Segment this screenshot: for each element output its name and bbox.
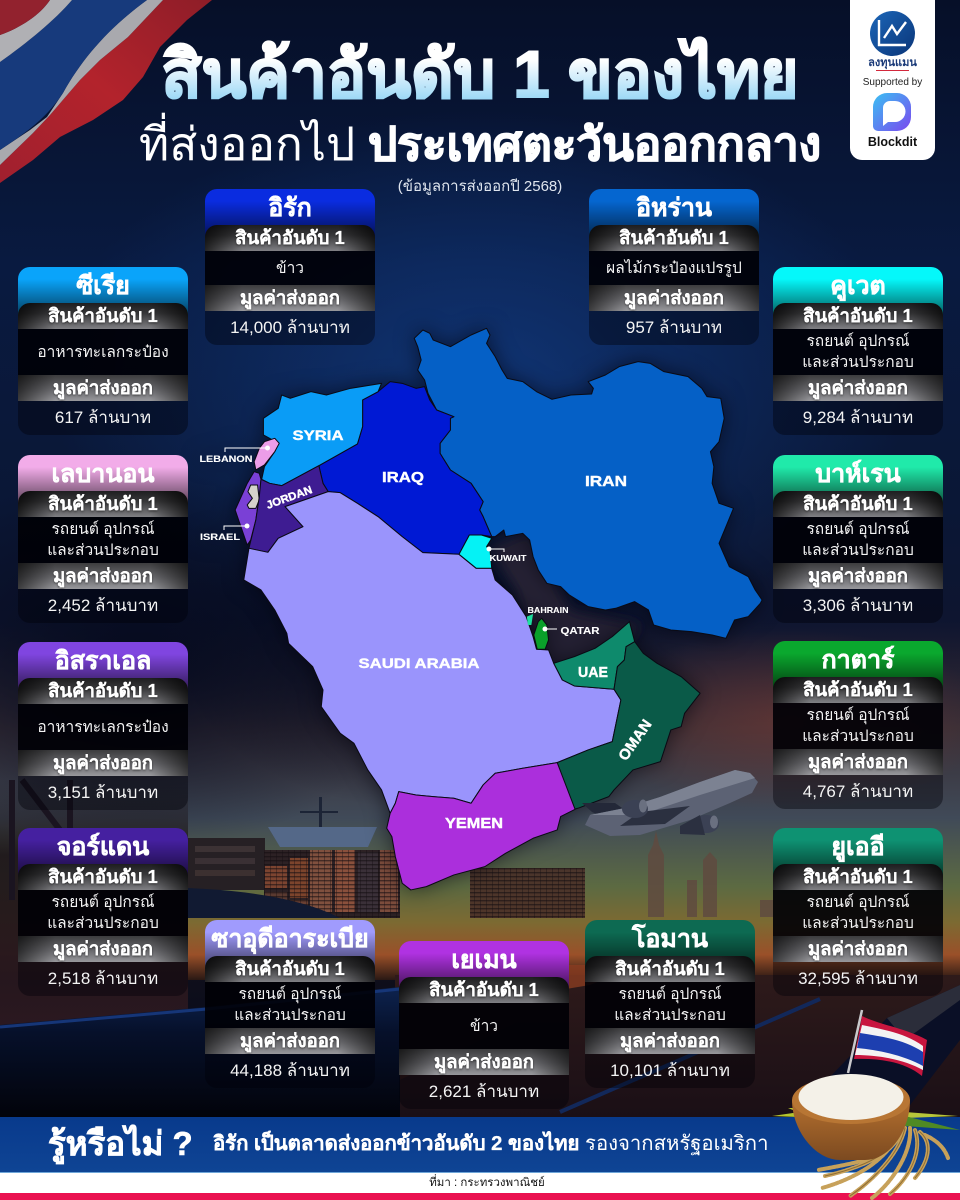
country name [589,189,759,237]
value [18,776,188,810]
product: และส่วนประกอบ [802,728,914,745]
value label: มูลค่าส่งออก [240,1030,340,1051]
country labels [200,427,656,832]
lower white band [0,0,163,165]
rank label: สินค้าอันดับ 1 [803,305,913,326]
value: 44,188 ล้านบาท [230,1061,350,1080]
rank label: สินค้าอันดับ 1 [48,680,158,701]
country name: คูเวต [830,272,886,300]
product: และส่วนประกอบ [802,915,914,932]
title line 1: สินค้าอันดับ 1 ของไทย [162,38,798,111]
value: 2,621 ล้านบาท [429,1082,539,1101]
rank label: สินค้าอันดับ 1 [48,305,158,326]
country: bahrain [527,614,533,625]
rank label [773,677,943,703]
product: รถยนต์ อุปกรณ์ [806,521,909,538]
country name: เยเมน [451,946,517,974]
value: 4,767 ล้านบาท [803,782,913,801]
fuselage [585,770,758,836]
value label: มูลค่าส่งออก [53,752,153,773]
value [18,962,188,996]
subtitle: (ข้อมูลการส่งออกปี 2568) [398,178,562,195]
value label [205,1028,375,1054]
value: 32,595 ล้านบาท [798,969,918,988]
rice [798,1074,904,1120]
engine [693,815,719,833]
rank label [589,225,759,251]
card: lebanon [18,455,188,623]
label: iraq: IRAQ [382,469,424,486]
lower red band [0,0,212,183]
card: oman [585,920,755,1088]
card: kuwait [773,267,943,435]
value: 2,518 ล้านบาท [48,969,158,988]
label: oman: OMAN [615,717,656,764]
rank label: สินค้าอันดับ 1 [48,866,158,887]
product [205,982,375,1028]
product: รถยนต์ อุปกรณ์ [806,894,909,911]
country: iraq [319,382,492,554]
product: อาหารทะเลกระป๋อง [37,718,169,736]
source strip [0,1173,960,1193]
country name: เลบานอน [52,460,154,488]
country name: ซีเรีย [76,272,130,300]
value: 617 ล้านบาท [55,408,151,427]
value label: มูลค่าส่งออก [808,377,908,398]
label: israel: ISRAEL [200,532,241,542]
value label: มูลค่าส่งออก [808,751,908,772]
country name: กาตาร์ [822,646,894,674]
product: รถยนต์ อุปกรณ์ [806,333,909,350]
value: 14,000 ล้านบาท [230,318,350,337]
value label: มูลค่าส่งออก [53,938,153,959]
value: 3,306 ล้านบาท [803,596,913,615]
gulf dark patch [488,530,640,690]
rank label: สินค้าอันดับ 1 [619,227,729,248]
card: syria [18,267,188,435]
lower right road [395,975,960,1118]
value [773,775,943,809]
card: yemen [399,941,569,1109]
product [773,890,943,936]
rank label: สินค้าอันดับ 1 [615,958,725,979]
country: lebanon [254,438,279,470]
icon: blockdit logo [873,93,911,131]
product [773,329,943,375]
rank label [773,491,943,517]
rank label: สินค้าอันดับ 1 [803,866,913,887]
lower left sea and hull [0,987,400,1118]
product: และส่วนประกอบ [47,915,159,932]
country: kuwait [459,535,492,568]
flag [854,1016,927,1076]
title line 1 [0,36,960,114]
product: รถยนต์ อุปกรณ์ [51,521,154,538]
blockdit name: Blockdit [868,135,917,149]
product: และส่วนประกอบ [234,1007,346,1024]
rank label [773,864,943,890]
value [589,311,759,345]
card: israel [18,642,188,810]
upper white band [0,0,72,62]
rank label [205,225,375,251]
flag pole [848,1010,862,1073]
card: saudi arabia [205,920,375,1080]
country name [773,267,943,315]
rank label [205,956,375,982]
country: yemen [387,763,575,890]
label: syria: SYRIA [292,427,344,443]
container ship [187,797,585,918]
product: และส่วนประกอบ [802,354,914,371]
value [399,1075,569,1109]
country name [773,641,943,689]
rank label: สินค้าอันดับ 1 [803,679,913,700]
rank label: สินค้าอันดับ 1 [235,958,345,979]
country name: อิสราเอล [55,647,151,675]
card: bahrain [773,455,943,623]
label: lebanon: LEBANON [200,454,252,464]
product [585,982,755,1028]
country name [585,920,755,968]
country name: อิหร่าน [636,194,712,222]
title [139,36,821,195]
product [18,890,188,936]
country name: อิรัก [268,194,312,222]
value [205,311,375,345]
value label [773,563,943,589]
rank label: สินค้าอันดับ 1 [429,979,539,1000]
label: bahrain: BAHRAIN [528,605,568,615]
value label: มูลค่าส่งออก [624,287,724,308]
upper red corner [0,0,50,35]
wing [620,806,690,826]
value [18,589,188,623]
rank label: สินค้าอันดับ 1 [803,493,913,514]
product [399,1003,569,1049]
value label: มูลค่าส่งออก [808,565,908,586]
rank label [18,678,188,704]
country name [18,267,188,315]
logo panel [850,0,935,160]
value label [773,375,943,401]
product: และส่วนประกอบ [802,542,914,559]
country name: ยูเออี [831,833,885,861]
banner fact: อิรัก เป็นตลาดส่งออกข้าวอันดับ 2 ของไทย รองจากสหรัฐอเมริกา [213,1133,768,1155]
rank label [773,303,943,329]
value [773,589,943,623]
title line 2: ที่ส่งออกไป ประเทศตะวันออกกลาง [139,118,821,170]
value label [589,285,759,311]
engine [622,800,648,818]
value label: มูลค่าส่งออก [240,287,340,308]
value: 957 ล้านบาท [626,318,722,337]
value label [773,936,943,962]
value label: มูลค่าส่งออก [434,1051,534,1072]
palestine [247,485,259,508]
label: saudi arabia: SAUDI ARABIA [358,655,480,671]
country name [18,828,188,876]
value: 3,151 ล้านบาท [48,783,158,802]
value label [399,1049,569,1075]
product [18,704,188,750]
blue band [0,0,147,150]
value label [773,749,943,775]
value label [18,750,188,776]
card: qatar [773,641,943,809]
card: iraq [205,189,375,345]
leaves [772,1108,960,1130]
value label: มูลค่าส่งออก [53,565,153,586]
country: qatar [534,618,549,649]
callout leader lines [224,446,557,632]
label: qatar: QATAR [560,625,600,637]
country: uae [554,622,635,689]
rank label [18,303,188,329]
banner heading: รู้หรือไม่ ? [48,1125,193,1162]
country name: ซาอุดีอาระเบีย [211,925,369,953]
country name [773,828,943,876]
card: jordan [18,828,188,996]
country: syria [262,383,382,486]
value label [18,375,188,401]
value label [18,563,188,589]
value [773,962,943,996]
icon: long-term investor logo [870,11,915,56]
value [585,1054,755,1088]
icon: airplane [582,770,758,836]
tail [582,803,632,820]
product: ข้าว [276,260,304,276]
country name: จอร์แดน [57,833,149,861]
label: jordan: JORDAN [265,484,314,512]
value label: มูลค่าส่งออก [53,377,153,398]
rank label [399,977,569,1003]
bowl [792,1076,910,1160]
country: iran [414,328,762,638]
product [18,517,188,563]
right skyline [648,831,773,917]
country name [18,642,188,690]
value: 2,452 ล้านบาท [48,596,158,615]
country name [205,189,375,237]
product: ผลไม้กระป๋องแปรรูป [606,260,742,276]
product [18,329,188,375]
product [773,517,943,563]
label: iran: IRAN [585,473,627,490]
country: jordan [249,466,328,552]
value [773,401,943,435]
country name [773,455,943,503]
product: และส่วนประกอบ [614,1007,726,1024]
value label [205,285,375,311]
rank label: สินค้าอันดับ 1 [235,227,345,248]
country name [18,455,188,503]
product [589,251,759,285]
card: uae [773,828,943,996]
product: รถยนต์ อุปกรณ์ [806,707,909,724]
supported by: Supported by [863,77,922,88]
product: รถยนต์ อุปกรณ์ [618,986,721,1003]
value: 10,101 ล้านบาท [610,1061,730,1080]
crane [12,780,70,900]
fact banner [0,1117,960,1173]
thai flag ribbon top left [0,0,212,183]
product: รถยนต์ อุปกรณ์ [51,894,154,911]
label: kuwait: KUWAIT [490,553,527,563]
value [18,401,188,435]
source strip: ที่มา : กระทรวงพาณิชย์ [429,1177,545,1189]
value label: มูลค่าส่งออก [808,938,908,959]
country: oman [557,642,700,809]
red footer bar [0,1193,960,1200]
value: 9,284 ล้านบาท [803,408,913,427]
icon: rice bowl with thai flag [772,1010,960,1200]
value label [18,936,188,962]
product [773,703,943,749]
product: อาหารทะเลกระป๋อง [37,344,169,360]
country: israel [235,472,261,545]
rank label [585,956,755,982]
card: iran [589,189,759,345]
rank label [18,491,188,517]
country name [399,941,569,989]
product: ข้าว [470,1018,498,1034]
rank label [18,864,188,890]
product: และส่วนประกอบ [47,542,159,559]
value [205,1054,375,1088]
product [205,251,375,285]
product: รถยนต์ อุปกรณ์ [238,986,341,1003]
country name [205,920,375,968]
value label: มูลค่าส่งออก [620,1030,720,1051]
label: uae: UAE [578,664,608,681]
label: yemen: YEMEN [445,815,503,832]
rank label: สินค้าอันดับ 1 [48,493,158,514]
logo name: ลงทุนแมน [868,57,917,69]
country name: โอมาน [632,925,708,953]
country: saudi arabia [244,492,621,813]
rice stalks [818,1128,948,1198]
value label [585,1028,755,1054]
country name: บาห์เรน [815,460,901,488]
